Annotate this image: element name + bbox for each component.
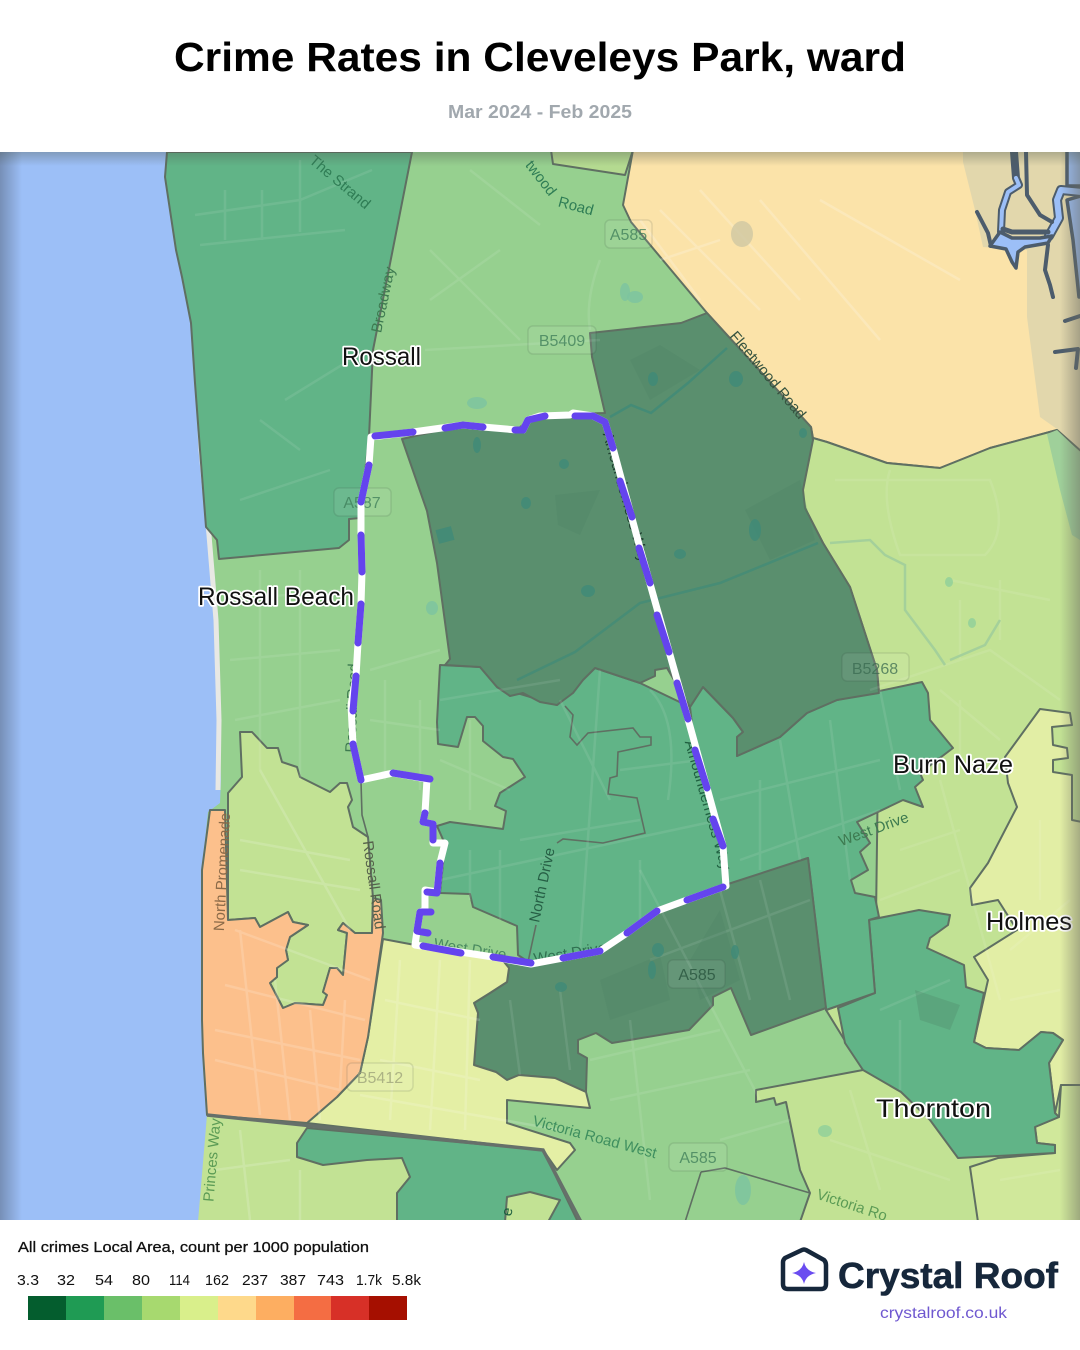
land base: light green area bbox=[204, 152, 876, 1220]
road shields: A585 bbox=[678, 967, 716, 984]
area: thick district boundary bbox=[207, 1115, 581, 1222]
place labels: Burn Naze bbox=[893, 751, 1013, 779]
area: marsh green strip bbox=[1047, 430, 1080, 540]
road labels: North Drive bbox=[526, 846, 559, 924]
area: orange high-crime zone bbox=[202, 810, 383, 1123]
road labels bbox=[200, 152, 911, 1225]
logo: Crystal Roof bbox=[783, 1250, 1059, 1322]
area: tan marsh overlay bbox=[963, 152, 1080, 452]
area: pale yellow south zone bbox=[307, 939, 590, 1170]
legend value labels bbox=[17, 1272, 422, 1289]
area: dark green north block bbox=[402, 313, 879, 756]
legend value labels: 5.8k bbox=[392, 1272, 422, 1289]
legend value labels: 237 bbox=[242, 1272, 268, 1289]
area: small pale island bbox=[505, 1192, 560, 1222]
legend value labels: 743 bbox=[317, 1272, 344, 1289]
panel: choropleth map bbox=[0, 150, 1080, 1225]
legend value labels: 1.7k bbox=[356, 1272, 382, 1289]
legend title: All crimes Local Area, count per 1000 population bbox=[18, 1239, 369, 1256]
area: south-west pale green bbox=[198, 1116, 409, 1220]
road shields: A587 bbox=[343, 495, 381, 512]
legend bbox=[17, 1239, 422, 1320]
area: south-east pale block bbox=[970, 1085, 1080, 1222]
ward boundary: Cleveleys Park dashed outline bbox=[351, 413, 726, 964]
road labels: Amounderness Way bbox=[599, 430, 652, 565]
area: central ward green bbox=[437, 665, 726, 963]
legend colour bar bbox=[28, 1296, 407, 1320]
road labels: twood bbox=[522, 157, 560, 199]
road labels: West Drive bbox=[433, 935, 507, 964]
subtitle: date range: Mar 2024 - Feb 2025 bbox=[448, 102, 632, 122]
place labels: Rossall Beach bbox=[198, 583, 354, 611]
area: north-east yellow zone bbox=[623, 150, 1080, 468]
road shields: A585 bbox=[610, 227, 647, 244]
area: north-west green ward bbox=[165, 152, 412, 559]
website url: crystalroof.co.uk bbox=[880, 1305, 1008, 1322]
area: Holmes pale yellow zone bbox=[970, 709, 1080, 1113]
boundary lines between similar zones bbox=[361, 706, 810, 1222]
area: south-west green ward bbox=[297, 1128, 578, 1222]
road shields: B5412 bbox=[357, 1070, 403, 1087]
place labels: Thornton bbox=[876, 1095, 991, 1123]
place labels: Rossall bbox=[342, 343, 421, 371]
legend value labels: 387 bbox=[280, 1272, 306, 1289]
icon: streams bbox=[517, 348, 1000, 680]
road labels: Amounderness Way bbox=[681, 738, 734, 873]
road labels: Victoria Ro bbox=[814, 1186, 889, 1225]
road shields: A585 bbox=[679, 1150, 717, 1167]
icon: house with star bbox=[783, 1250, 826, 1289]
icon: estuary water channels bbox=[977, 150, 1080, 368]
beach strip bbox=[198, 431, 222, 790]
road labels: The Strand bbox=[306, 152, 374, 213]
place labels bbox=[198, 343, 1072, 1123]
road labels: Rossall Road bbox=[342, 663, 363, 753]
road shields: B5409 bbox=[539, 333, 585, 350]
legend value labels: 3.3 bbox=[17, 1272, 39, 1289]
road labels: Princes Way bbox=[200, 1117, 225, 1202]
area: sea bbox=[0, 152, 221, 1220]
road shields bbox=[334, 220, 909, 1171]
legend value labels: 32 bbox=[57, 1272, 75, 1289]
road labels: Rossall Road bbox=[359, 840, 388, 930]
legend value labels: 54 bbox=[95, 1272, 113, 1289]
area: pale green east zone bbox=[756, 430, 1080, 1222]
road shields: B5268 bbox=[852, 661, 898, 678]
title: Crime Rates in Cleveleys Park, ward bbox=[174, 34, 906, 80]
legend value labels: 114 bbox=[169, 1272, 190, 1289]
legend value labels: 80 bbox=[132, 1272, 150, 1289]
place labels: Holmes bbox=[986, 908, 1072, 936]
area: Thornton green ward bbox=[838, 910, 1063, 1158]
icon: ponds bbox=[426, 221, 976, 1205]
legend value labels: 162 bbox=[205, 1272, 229, 1289]
area: West Drive / Burn Naze green ward bbox=[690, 682, 953, 1010]
road labels: West Drive bbox=[837, 809, 911, 850]
road labels: Fleetwood Road bbox=[726, 328, 809, 423]
area: dark green south block bbox=[474, 858, 826, 1092]
logo wordmark: Crystal Roof bbox=[838, 1255, 1059, 1296]
road labels: Victoria Road West bbox=[531, 1113, 659, 1162]
road labels: Broadway bbox=[368, 265, 399, 334]
road labels: Road bbox=[556, 194, 595, 219]
darker woodland patches bbox=[805, 500, 960, 1030]
road labels: North Promenade bbox=[211, 812, 234, 932]
street network texture bbox=[195, 160, 1070, 1220]
map edge shading bbox=[0, 152, 1080, 1220]
road labels: West Drive bbox=[533, 939, 607, 968]
road labels: e bbox=[498, 1206, 517, 1217]
area: North Promenade pale green bbox=[228, 732, 373, 1008]
area: top pale patch bbox=[551, 150, 633, 175]
